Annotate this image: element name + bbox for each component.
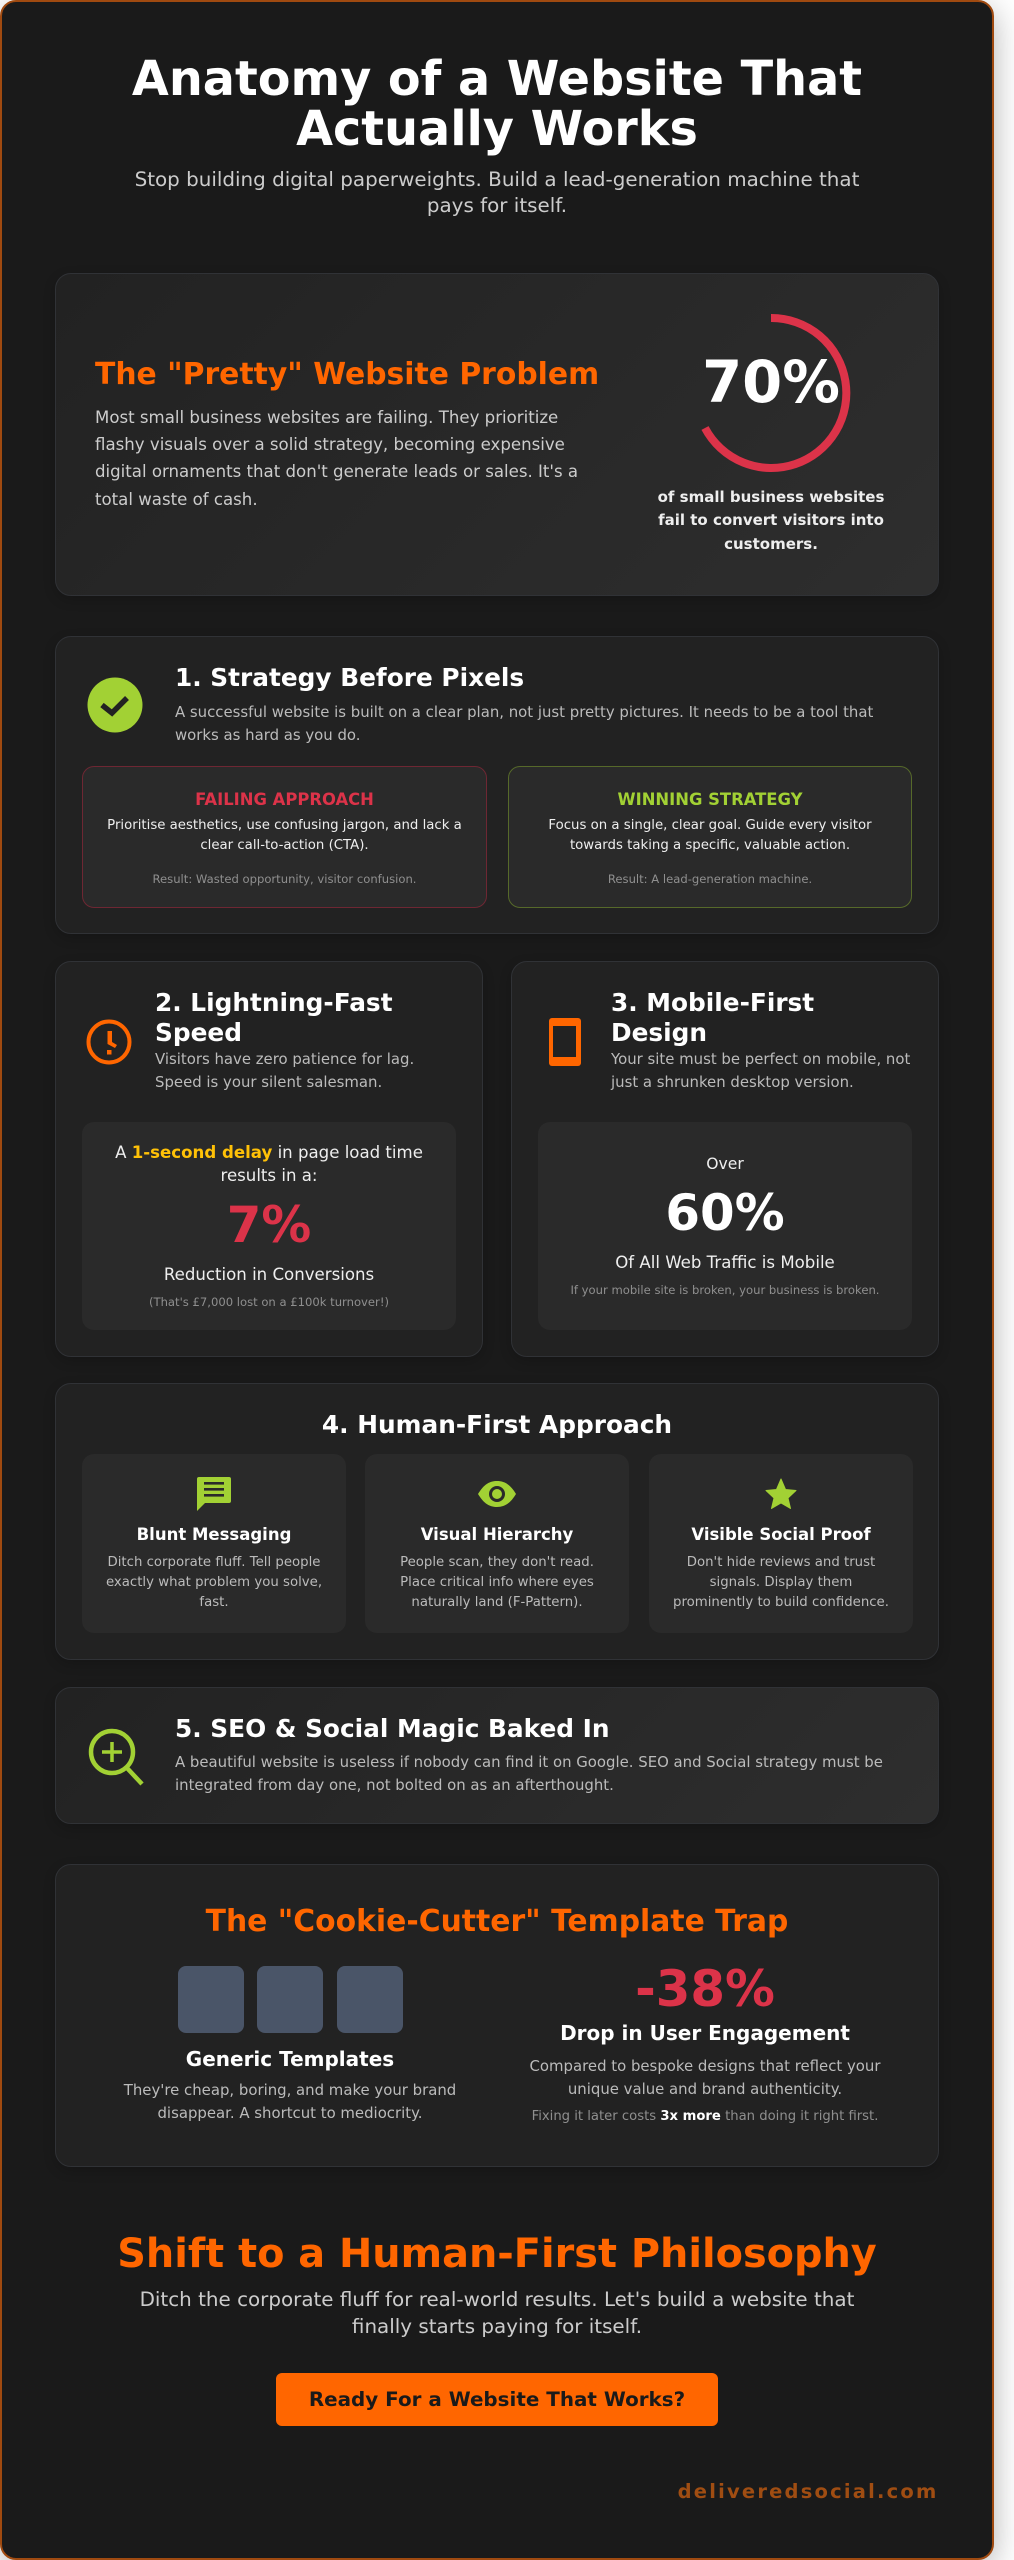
description: Your site must be perfect on mobile, not bbox=[611, 1050, 910, 1068]
donut chart: 70 percent bbox=[702, 314, 850, 472]
heading: The "Pretty" Website Problem bbox=[95, 357, 599, 392]
heading: 2. Lightning-Fast bbox=[155, 988, 393, 1017]
lead-in bbox=[115, 1143, 423, 1185]
stat box bbox=[82, 1122, 456, 1330]
subtitle bbox=[135, 168, 859, 217]
description: works as hard as you do. bbox=[175, 726, 360, 744]
stat label: Reduction in Conversions bbox=[164, 1265, 374, 1284]
problem text: digital ornaments that don't generate leads or sales. It's a bbox=[95, 462, 578, 481]
heading: The "Cookie-Cutter" Template Trap bbox=[206, 1904, 788, 1939]
text bbox=[400, 1555, 594, 1610]
button: Ready For a Website That Works? bbox=[309, 2388, 685, 2411]
panel: mobile-first design bbox=[511, 961, 939, 1357]
stat text: unique value and brand authenticity. bbox=[568, 2080, 842, 2098]
text: Ditch the corporate fluff for real-world results. Let's build a website that bbox=[140, 2288, 854, 2311]
text: Focus on a single, clear goal. Guide every visitor bbox=[548, 818, 872, 833]
panel: seo and social bbox=[55, 1687, 939, 1824]
result: Result: A lead-generation machine. bbox=[608, 872, 812, 886]
generic templates title: Generic Templates bbox=[186, 2047, 394, 2071]
title: Actually Works bbox=[296, 102, 698, 157]
heading bbox=[155, 988, 393, 1047]
card: visible social proof bbox=[649, 1454, 913, 1633]
footer brand: deliveredsocial.com bbox=[678, 2480, 938, 2503]
description bbox=[155, 1050, 414, 1091]
text: prominently to build confidence. bbox=[673, 1595, 889, 1610]
heading: 4. Human-First Approach bbox=[322, 1410, 672, 1439]
title: Visual Hierarchy bbox=[421, 1525, 573, 1544]
text: exactly what problem you solve, bbox=[106, 1575, 322, 1590]
icon: magnifier bbox=[88, 1728, 144, 1786]
text bbox=[548, 818, 872, 853]
generic templates text bbox=[124, 2081, 456, 2122]
description: Visitors have zero patience for lag. bbox=[155, 1050, 414, 1068]
stat value: 70% bbox=[702, 349, 840, 416]
stat text: Compared to bespoke designs that reflect your bbox=[530, 2057, 880, 2075]
stat caption bbox=[658, 488, 884, 553]
problem text bbox=[95, 408, 578, 509]
panel: the pretty website problem bbox=[55, 273, 939, 596]
heading: 3. Mobile-First bbox=[611, 988, 814, 1017]
problem text: total waste of cash. bbox=[95, 490, 258, 509]
header bbox=[132, 52, 862, 217]
stat caption: customers. bbox=[724, 535, 818, 553]
text: Prioritise aesthetics, use confusing jargon, and lack a bbox=[107, 818, 462, 833]
card: visual hierarchy bbox=[365, 1454, 629, 1633]
button bbox=[276, 2373, 718, 2426]
title: Blunt Messaging bbox=[137, 1525, 291, 1544]
text bbox=[106, 1555, 322, 1610]
stat caption: fail to convert visitors into bbox=[658, 511, 884, 529]
footnote: If your mobile site is broken, your business is broken. bbox=[570, 1283, 879, 1297]
lead-in: A 1-second delay in page load time bbox=[115, 1143, 423, 1162]
subtitle: pays for itself. bbox=[427, 194, 567, 217]
generic templates text: disappear. A shortcut to mediocrity. bbox=[157, 2104, 423, 2122]
winning strategy card bbox=[508, 766, 912, 908]
text: Don't hide reviews and trust bbox=[687, 1555, 875, 1570]
stat value: 7% bbox=[227, 1196, 311, 1254]
problem text: flashy visuals over a solid strategy, becoming expensive bbox=[95, 435, 565, 454]
text bbox=[107, 818, 462, 853]
description bbox=[175, 703, 873, 744]
text: Ditch corporate fluff. Tell people bbox=[108, 1555, 320, 1570]
heading: Shift to a Human-First Philosophy bbox=[117, 2231, 877, 2277]
icon: chat bbox=[197, 1477, 231, 1511]
stat value: -38% bbox=[635, 1960, 775, 2018]
stat text bbox=[530, 2057, 880, 2098]
failing approach card bbox=[82, 766, 487, 908]
icon: check circle bbox=[88, 678, 142, 732]
icon: eye bbox=[478, 1481, 516, 1507]
text bbox=[673, 1555, 889, 1610]
text: finally starts paying for itself. bbox=[352, 2315, 642, 2338]
text: clear call-to-action (CTA). bbox=[200, 838, 369, 853]
call to action bbox=[117, 2231, 877, 2426]
stat label: Drop in User Engagement bbox=[560, 2021, 850, 2045]
footnote: (That's £7,000 lost on a £100k turnover!) bbox=[149, 1295, 389, 1309]
result: Result: Wasted opportunity, visitor confusion. bbox=[152, 872, 416, 886]
lead-in: Over bbox=[706, 1155, 744, 1173]
panel: strategy before pixels bbox=[55, 636, 939, 934]
text: towards taking a specific, valuable action. bbox=[570, 838, 850, 853]
heading: Speed bbox=[155, 1018, 242, 1047]
icon: star bbox=[766, 1478, 796, 1509]
card: blunt messaging bbox=[82, 1454, 346, 1633]
description bbox=[175, 1753, 883, 1794]
description: Speed is your silent salesman. bbox=[155, 1073, 382, 1091]
text: fast. bbox=[199, 1595, 229, 1610]
lead-in: results in a: bbox=[220, 1166, 318, 1185]
stat caption: of small business websites bbox=[658, 488, 884, 506]
title: Visible Social Proof bbox=[691, 1525, 871, 1544]
subtitle: Stop building digital paperweights. Build a lead-generation machine that bbox=[135, 168, 859, 191]
stat note: Fixing it later costs 3x more than doing it right first. bbox=[532, 2109, 878, 2124]
title: Anatomy of a Website That bbox=[132, 52, 862, 107]
description: A successful website is built on a clear plan, not just pretty pictures. It needs to be a tool that bbox=[175, 703, 873, 721]
title bbox=[132, 52, 862, 157]
stat box bbox=[538, 1122, 912, 1330]
description bbox=[610, 1050, 910, 1091]
icon: clock bbox=[86, 1020, 132, 1064]
text: People scan, they don't read. bbox=[400, 1555, 594, 1570]
stat value: 60% bbox=[665, 1184, 785, 1242]
text: Place critical info where eyes bbox=[400, 1575, 594, 1590]
panel: human-first approach bbox=[55, 1383, 939, 1660]
label: FAILING APPROACH bbox=[195, 790, 374, 809]
text: naturally land (F-Pattern). bbox=[411, 1595, 583, 1610]
panel: lightning-fast speed bbox=[55, 961, 483, 1357]
heading: 1. Strategy Before Pixels bbox=[175, 663, 524, 692]
description: A beautiful website is useless if nobody can find it on Google. SEO and Social strategy must be bbox=[175, 1753, 883, 1771]
text: signals. Display them bbox=[710, 1575, 852, 1590]
label: WINNING STRATEGY bbox=[618, 790, 802, 809]
problem text: Most small business websites are failing. They prioritize bbox=[95, 408, 558, 427]
description: integrated from day one, not bolted on as an afterthought. bbox=[175, 1776, 614, 1794]
template blocks bbox=[178, 1966, 403, 2033]
heading: Design bbox=[611, 1018, 707, 1047]
heading bbox=[611, 988, 814, 1047]
stat label: Of All Web Traffic is Mobile bbox=[615, 1253, 835, 1272]
heading: 5. SEO & Social Magic Baked In bbox=[175, 1714, 610, 1743]
text bbox=[140, 2288, 854, 2338]
panel: cookie-cutter template trap bbox=[55, 1864, 939, 2167]
icon: phone bbox=[549, 1018, 581, 1066]
description: just a shrunken desktop version. bbox=[611, 1073, 854, 1091]
generic templates text: They're cheap, boring, and make your brand bbox=[124, 2081, 456, 2099]
